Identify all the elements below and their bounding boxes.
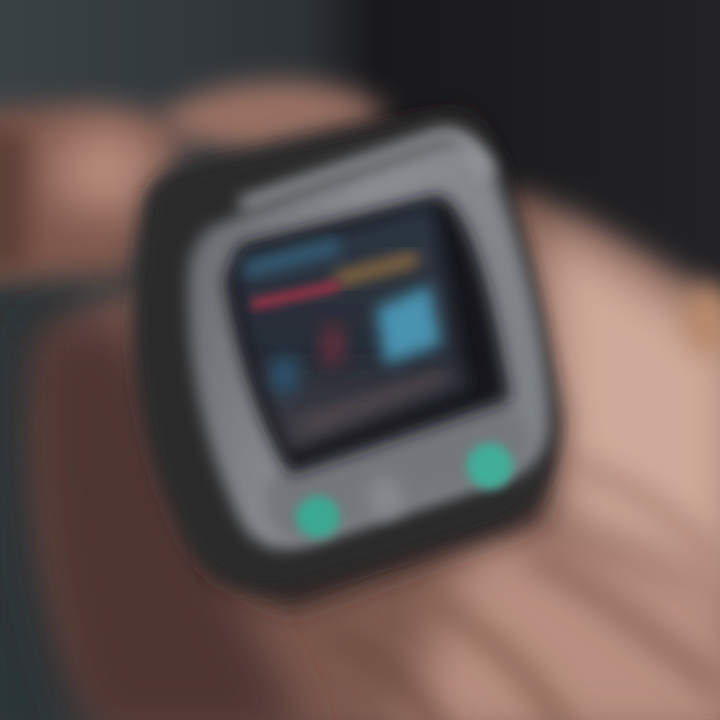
screen: lower band bbox=[305, 375, 445, 425]
screen: orange band bbox=[335, 258, 418, 280]
device: right green button bbox=[467, 443, 513, 489]
device: left green button bbox=[296, 496, 340, 538]
device: screen bbox=[236, 205, 468, 452]
device: shadow bbox=[150, 115, 560, 610]
finger: upper left bbox=[0, 106, 190, 280]
screen: red mark bbox=[320, 323, 346, 367]
screen: blue header band bbox=[245, 245, 340, 270]
palm: bright right side bbox=[540, 220, 720, 600]
palm bbox=[40, 190, 720, 720]
screen: display background bbox=[236, 205, 468, 452]
screen: red band bbox=[252, 285, 340, 305]
device: metal bezel bbox=[188, 143, 550, 548]
background: lower-left shadow bbox=[0, 280, 80, 720]
hand: skin spot at right edge bbox=[684, 284, 720, 356]
screen: light blue tile bbox=[376, 285, 442, 365]
device: middle buttons bbox=[367, 477, 403, 517]
hand: finger creases lower right bbox=[530, 555, 720, 690]
device: outer casing bbox=[132, 115, 555, 591]
palm: lower right skin bbox=[400, 530, 720, 720]
device bbox=[132, 115, 560, 610]
device: top bezel highlight bbox=[240, 134, 490, 205]
palm: dark left shadow bbox=[28, 315, 310, 720]
finger: top bbox=[160, 82, 390, 150]
finger: highlight bbox=[50, 125, 160, 215]
finger: dark edge bbox=[0, 130, 25, 270]
screen: blue mark bbox=[270, 355, 300, 395]
device: bottom panel bbox=[265, 405, 530, 541]
device: screen frame bbox=[225, 195, 510, 475]
